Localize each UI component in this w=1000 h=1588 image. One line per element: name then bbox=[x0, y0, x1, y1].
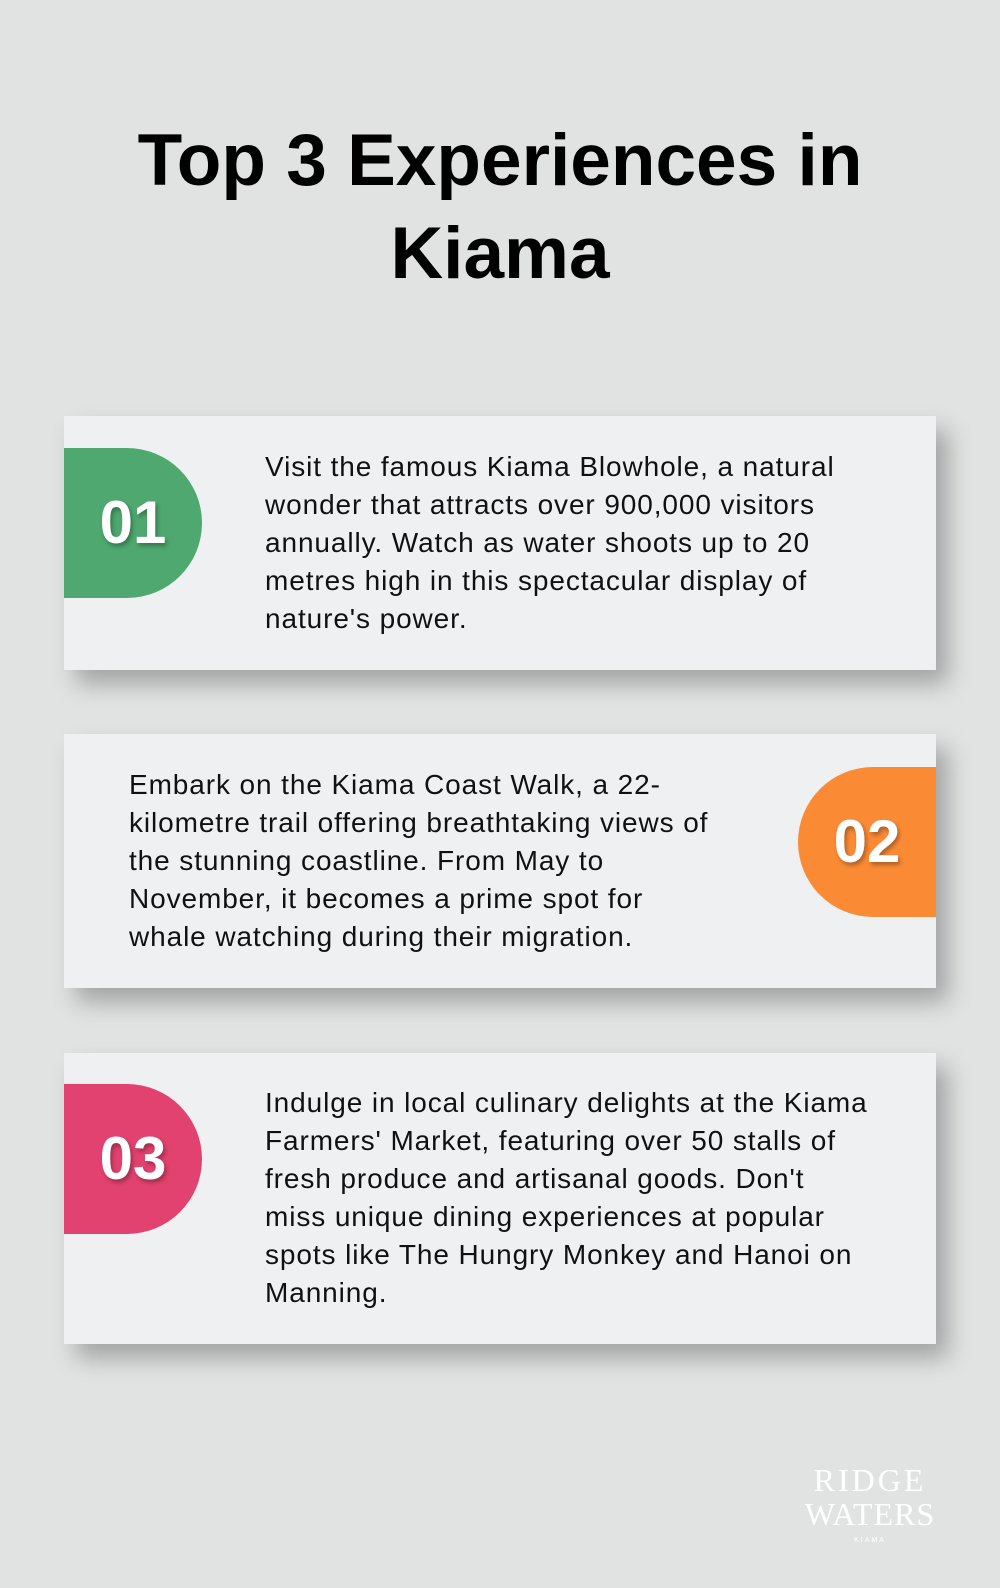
logo: WATERS bbox=[805, 1496, 935, 1532]
text 2: whale watching during their migration. bbox=[129, 921, 633, 952]
title: Kiama bbox=[390, 213, 610, 294]
badge 03: 03 bbox=[100, 1125, 166, 1192]
logo: KIAMA bbox=[854, 1537, 886, 1544]
text 1: nature's power. bbox=[265, 603, 468, 634]
badge 01 bbox=[64, 448, 202, 598]
text 3: spots like The Hungry Monkey and Hanoi on bbox=[265, 1239, 852, 1270]
panel: card 2 bbox=[64, 734, 936, 988]
text 1: Visit the famous Kiama Blowhole, a natural bbox=[265, 451, 835, 482]
title: Top 3 Experiences in bbox=[138, 120, 862, 201]
badge 01: 01 bbox=[100, 489, 166, 556]
panel: card 1 bbox=[64, 416, 936, 670]
text 3: Indulge in local culinary delights at the Kiama bbox=[265, 1087, 868, 1118]
text 1: wonder that attracts over 900,000 visitors bbox=[265, 489, 815, 520]
text 2: Embark on the Kiama Coast Walk, a 22- bbox=[129, 769, 661, 800]
logo: RIDGE bbox=[814, 1462, 926, 1498]
text 1 bbox=[265, 451, 835, 634]
badge 02: 02 bbox=[834, 808, 900, 875]
panel: card 3 bbox=[64, 1053, 936, 1344]
text 3: Manning. bbox=[265, 1277, 387, 1308]
text 3: fresh produce and artisanal goods. Don't bbox=[265, 1163, 804, 1194]
text 1: metres high in this spectacular display of bbox=[265, 565, 807, 596]
logo bbox=[804, 1462, 935, 1544]
text 3: Farmers' Market, featuring over 50 stalls of bbox=[265, 1125, 836, 1156]
text 1: annually. Watch as water shoots up to 20 bbox=[265, 527, 810, 558]
text 3: miss unique dining experiences at popular bbox=[265, 1201, 825, 1232]
text 2: November, it becomes a prime spot for bbox=[129, 883, 643, 914]
title bbox=[138, 120, 862, 294]
badge 02 bbox=[798, 767, 936, 917]
text 2: kilometre trail offering breathtaking views of bbox=[129, 807, 708, 838]
text 3 bbox=[265, 1087, 868, 1308]
text 2: the stunning coastline. From May to bbox=[129, 845, 604, 876]
text 2 bbox=[129, 769, 708, 952]
badge 03 bbox=[64, 1084, 202, 1234]
